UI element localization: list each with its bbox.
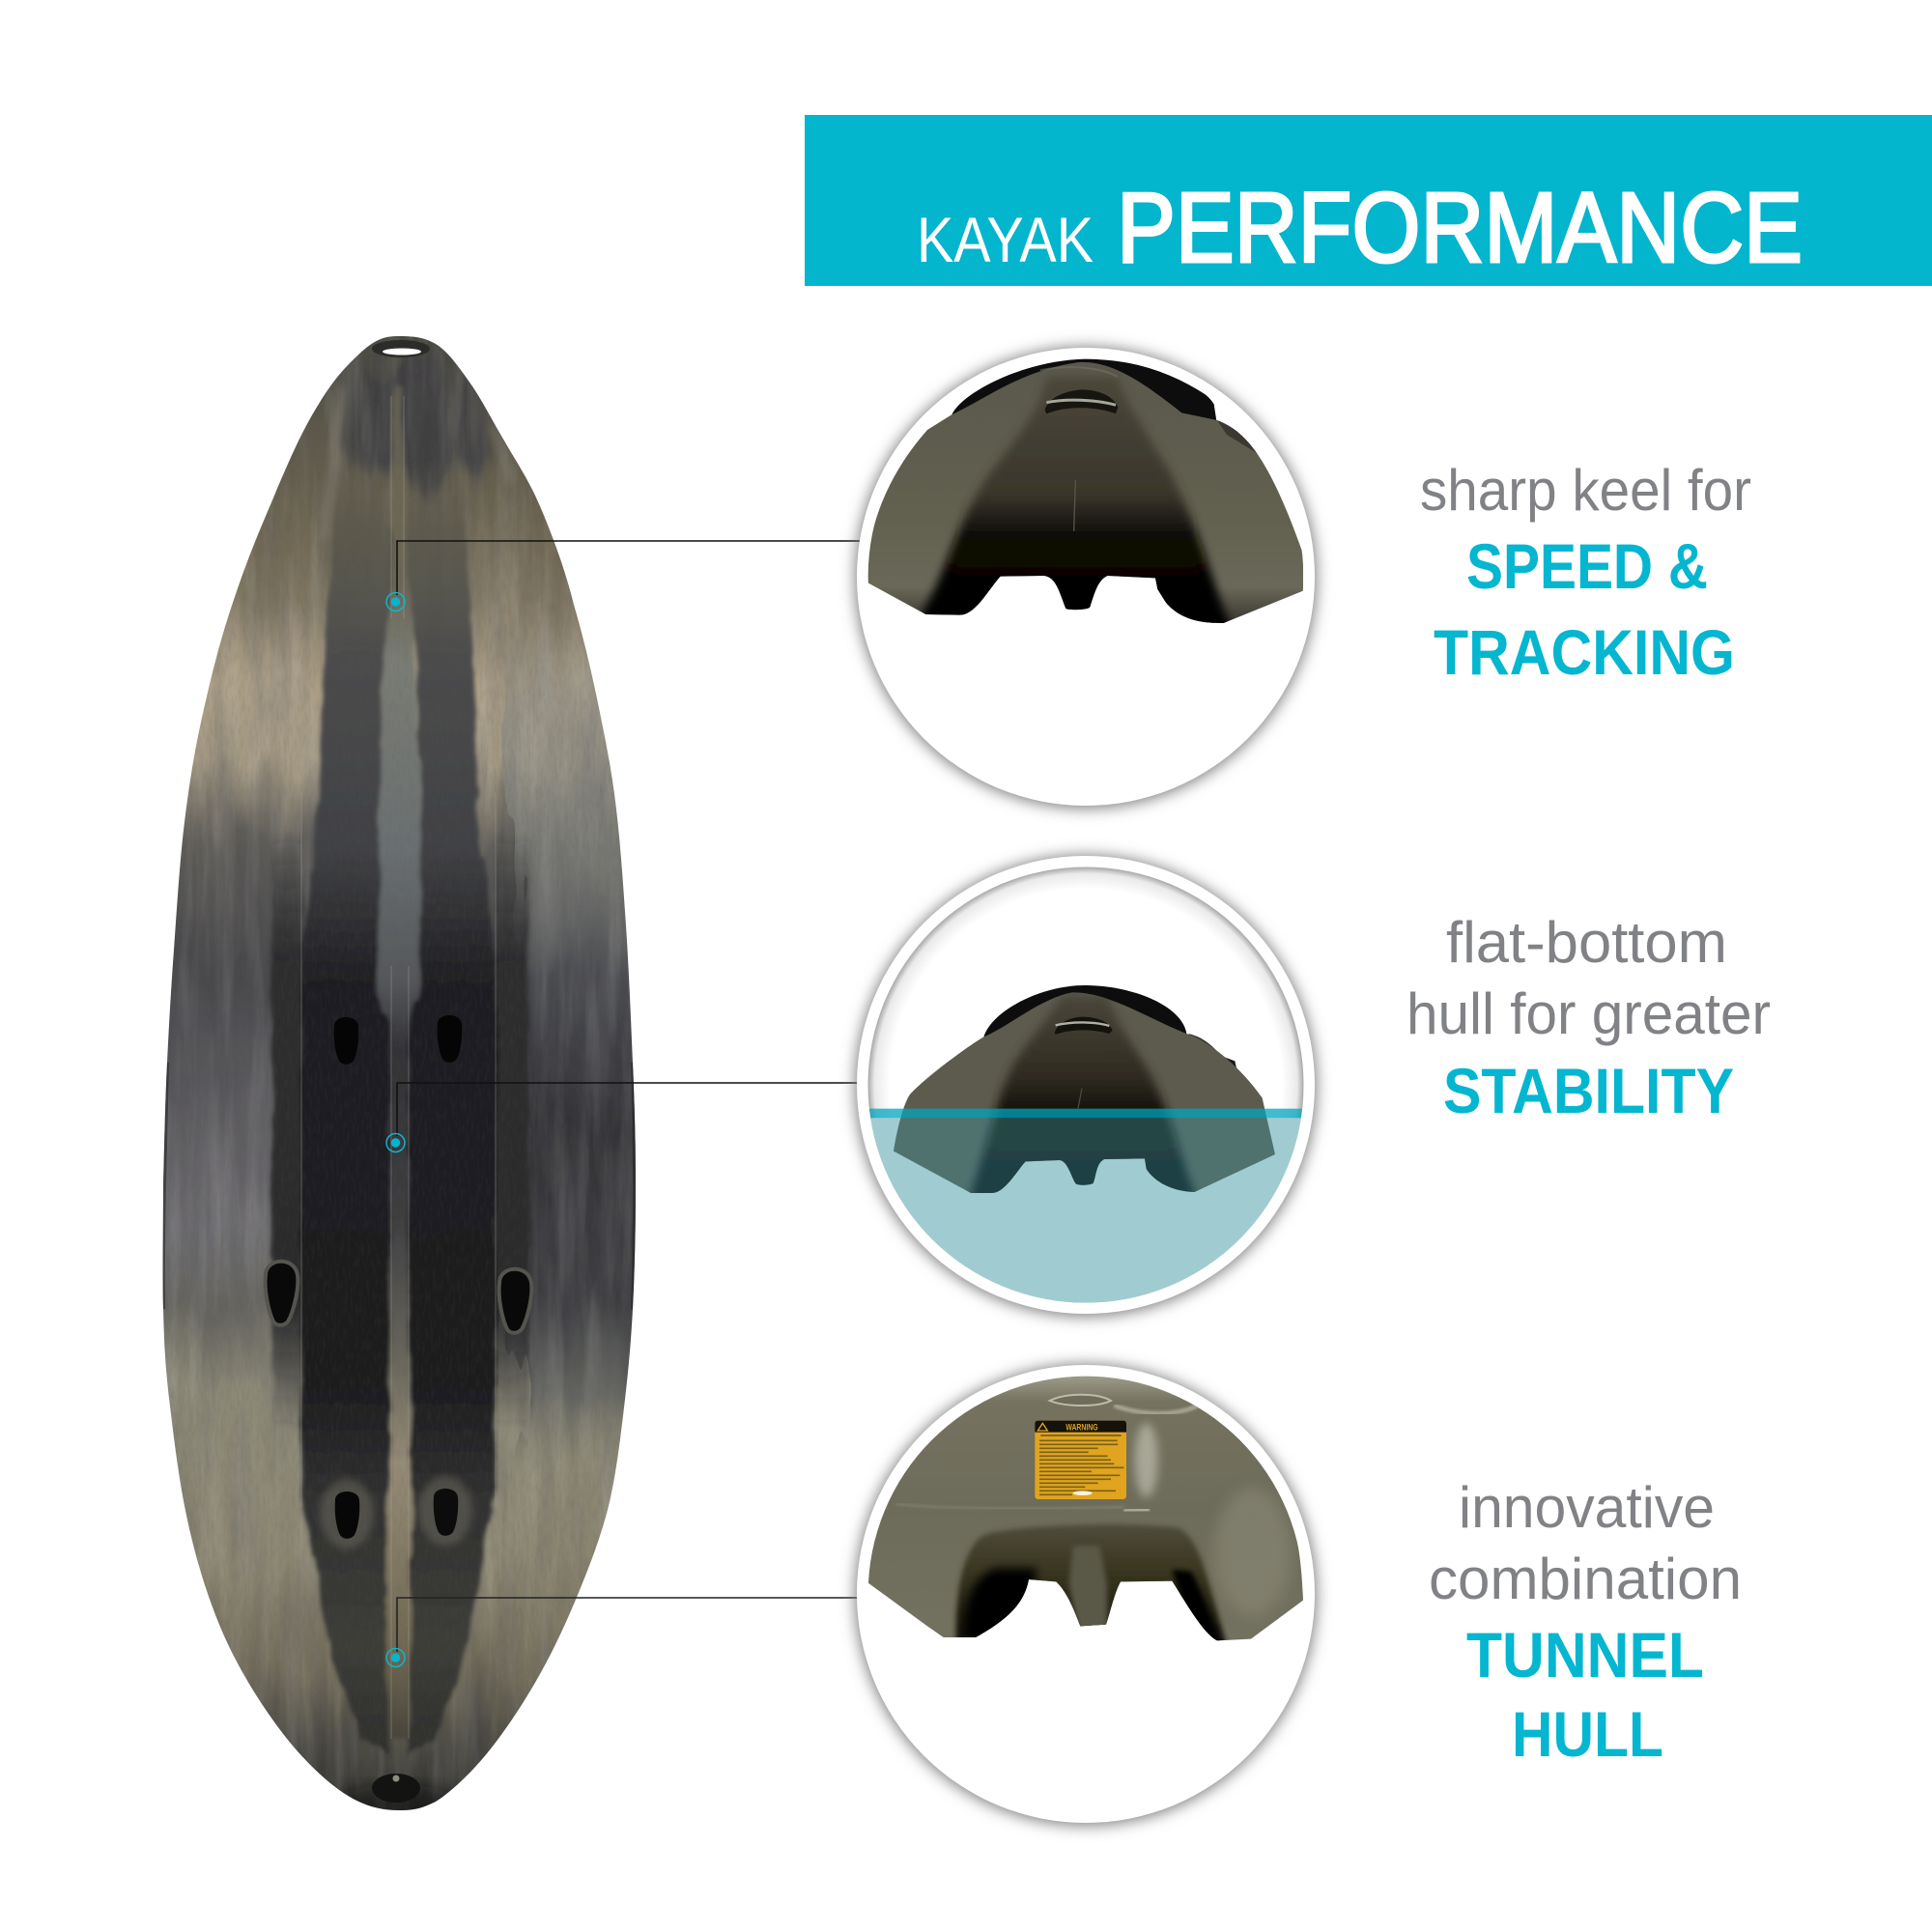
leader line: speed and tracking — [397, 541, 860, 595]
waterline band — [840, 1109, 1333, 1118]
panel: flat-bottom cross-section circle with water — [840, 856, 1333, 1344]
callout text: speed and tracking: SPEED & — [1466, 530, 1708, 602]
callout text: speed and tracking — [1420, 458, 1751, 688]
handle hole — [372, 340, 430, 357]
hull bow view: flat bottom — [886, 982, 1282, 1205]
leader line: stability — [397, 1083, 860, 1136]
callout text: tunnel hull: combination — [1429, 1547, 1742, 1611]
callout text: stability: STABILITY — [1443, 1055, 1734, 1126]
callout text: tunnel hull: HULL — [1512, 1698, 1663, 1770]
callout text: stability: flat-bottom — [1446, 910, 1727, 975]
water body — [870, 1118, 1301, 1302]
warning label: WARNING — [1065, 1422, 1098, 1432]
banner — [805, 115, 1932, 286]
callout text: tunnel hull: innovative — [1459, 1475, 1715, 1540]
title: PERFORMANCE — [1117, 172, 1803, 283]
scupper holes — [266, 1015, 531, 1548]
kayak hull top view — [162, 336, 636, 1810]
callout text: speed and tracking: sharp keel for — [1420, 458, 1751, 523]
hull stern view: tunnel — [860, 1369, 1311, 1645]
leader line: tunnel hull — [397, 1598, 860, 1652]
warning label — [1035, 1421, 1126, 1499]
callout text: stability: hull for greater — [1406, 981, 1771, 1046]
marker dot: tunnel — [386, 1648, 405, 1667]
panel: tunnel hull cross-section circle — [856, 1365, 1316, 1825]
callout text: speed and tracking: TRACKING — [1434, 616, 1735, 688]
callout text: tunnel hull: TUNNEL — [1466, 1619, 1704, 1690]
hull bow view: sharp keel — [860, 355, 1311, 638]
marker dot: keel — [386, 593, 405, 611]
marker dot: flat bottom — [386, 1134, 405, 1151]
water tint over hull — [870, 1118, 1301, 1303]
callout text: tunnel hull — [1429, 1475, 1742, 1770]
panel: keel cross-section circle — [856, 348, 1316, 808]
title: KAYAK — [917, 204, 1094, 275]
rear drain — [372, 1774, 420, 1803]
callout text: stability — [1406, 910, 1771, 1126]
